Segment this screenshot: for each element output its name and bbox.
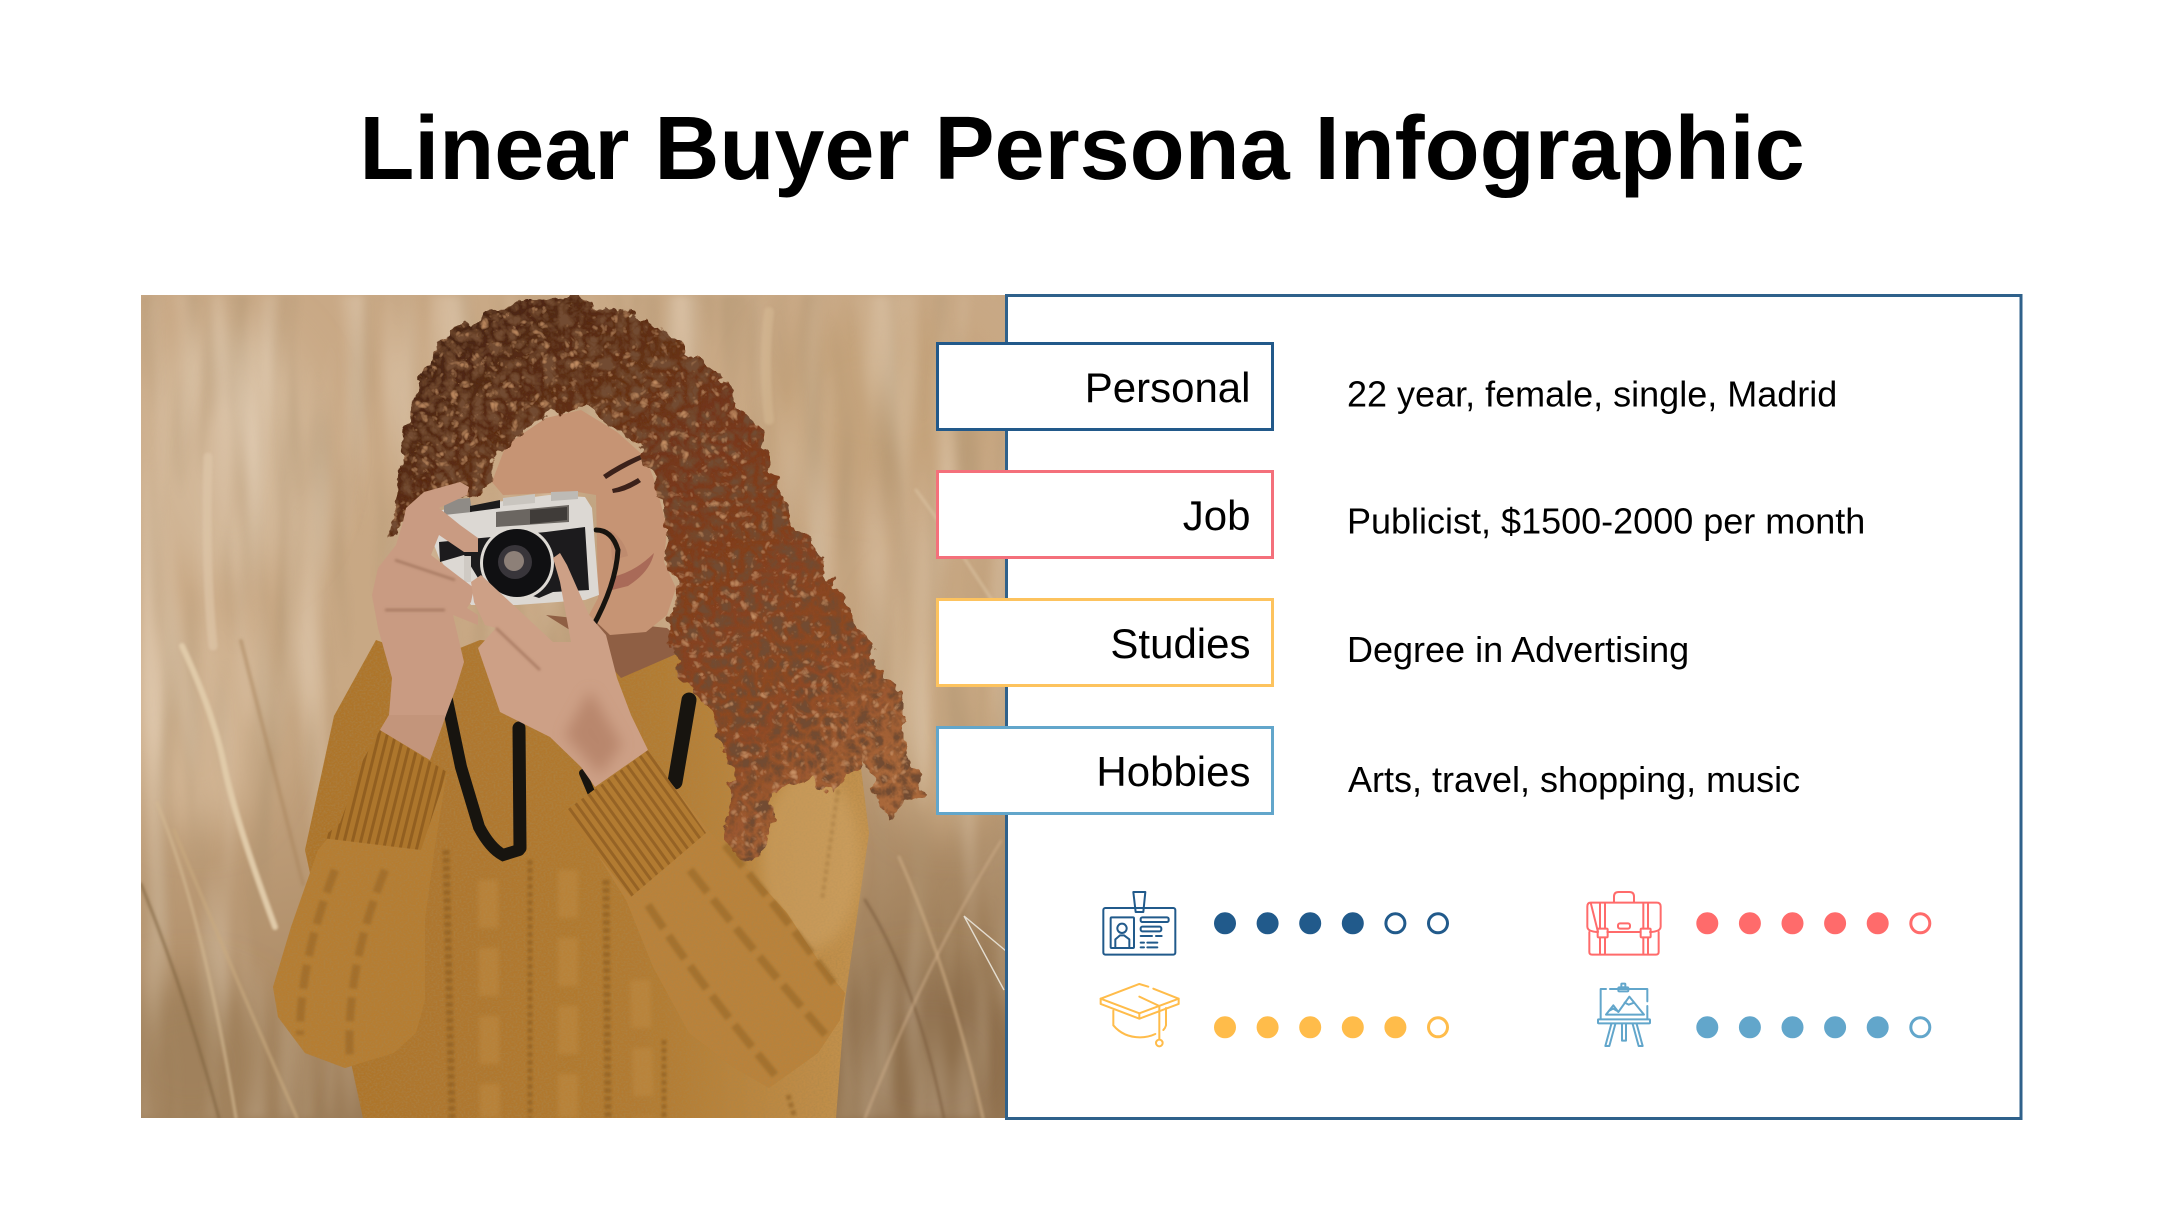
icon: painting easel xyxy=(1598,984,1650,1046)
text: hobbies details: Arts, travel, shopping, music xyxy=(1348,759,1800,800)
label box: Studies xyxy=(938,600,1272,686)
camera strap xyxy=(447,530,689,855)
label box: Job xyxy=(938,472,1272,558)
text: studies details: Degree in Advertising xyxy=(1347,629,1689,670)
icon: ID badge xyxy=(1103,892,1175,955)
photo: woman with camera in dry grass field xyxy=(141,295,1005,1118)
rating dots: studies 5 of 6 xyxy=(1216,1018,1448,1037)
camera xyxy=(428,491,599,605)
label box: Studies: Studies xyxy=(1110,620,1250,667)
icon: graduation cap xyxy=(1101,984,1179,1046)
neck and face xyxy=(492,410,690,678)
icon: briefcase xyxy=(1587,892,1661,955)
label box: Personal xyxy=(938,344,1272,430)
sleeves xyxy=(273,730,845,1088)
label box: Hobbies xyxy=(938,728,1272,814)
hands xyxy=(372,482,648,787)
panel: details frame xyxy=(1006,296,2021,1118)
small triangle mark xyxy=(964,916,1006,990)
label box: Personal: Personal xyxy=(1085,364,1250,411)
rating dots: personal 4 of 6 xyxy=(1216,914,1448,933)
rating dots: hobbies 5 of 6 xyxy=(1698,1018,1930,1037)
text: personal details: 22 year, female, single, Madrid xyxy=(1347,374,1837,414)
hair xyxy=(392,297,925,863)
label box: Hobbies: Hobbies xyxy=(1096,748,1250,795)
label box: Job: Job xyxy=(1183,492,1250,539)
rating dots: job 5 of 6 xyxy=(1698,914,1930,933)
text: job details: Publicist, $1500-2000 per month xyxy=(1347,500,1865,542)
sweater body xyxy=(305,640,869,1118)
title: Linear Buyer Persona Infographic xyxy=(359,99,1805,199)
